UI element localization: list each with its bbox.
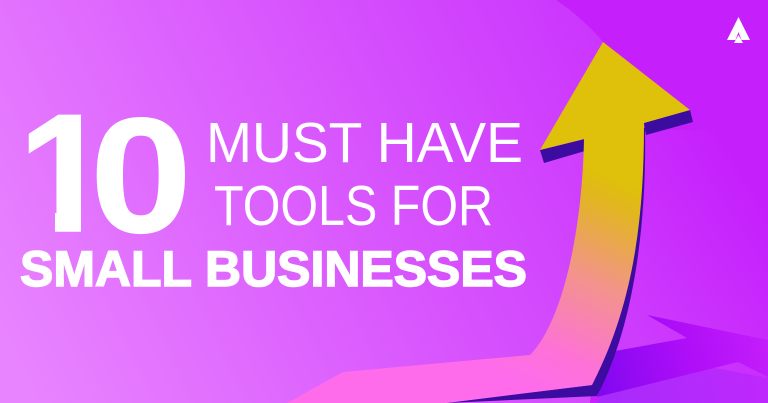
arrow body	[287, 42, 690, 403]
upward arrow	[287, 42, 693, 403]
title line: small businesses: SMALL BUSINESSES	[20, 241, 527, 297]
logo icon	[727, 17, 750, 43]
title line: tools for: TOOLS FOR	[214, 174, 493, 238]
arrow head underside	[540, 110, 693, 163]
title number: 0	[90, 84, 192, 267]
title line: must have: MUST HAVE	[206, 111, 523, 175]
title number: 1	[18, 79, 111, 267]
arrow shaft side	[440, 128, 645, 403]
title number	[28, 114, 185, 234]
arrow shadow	[597, 315, 768, 397]
